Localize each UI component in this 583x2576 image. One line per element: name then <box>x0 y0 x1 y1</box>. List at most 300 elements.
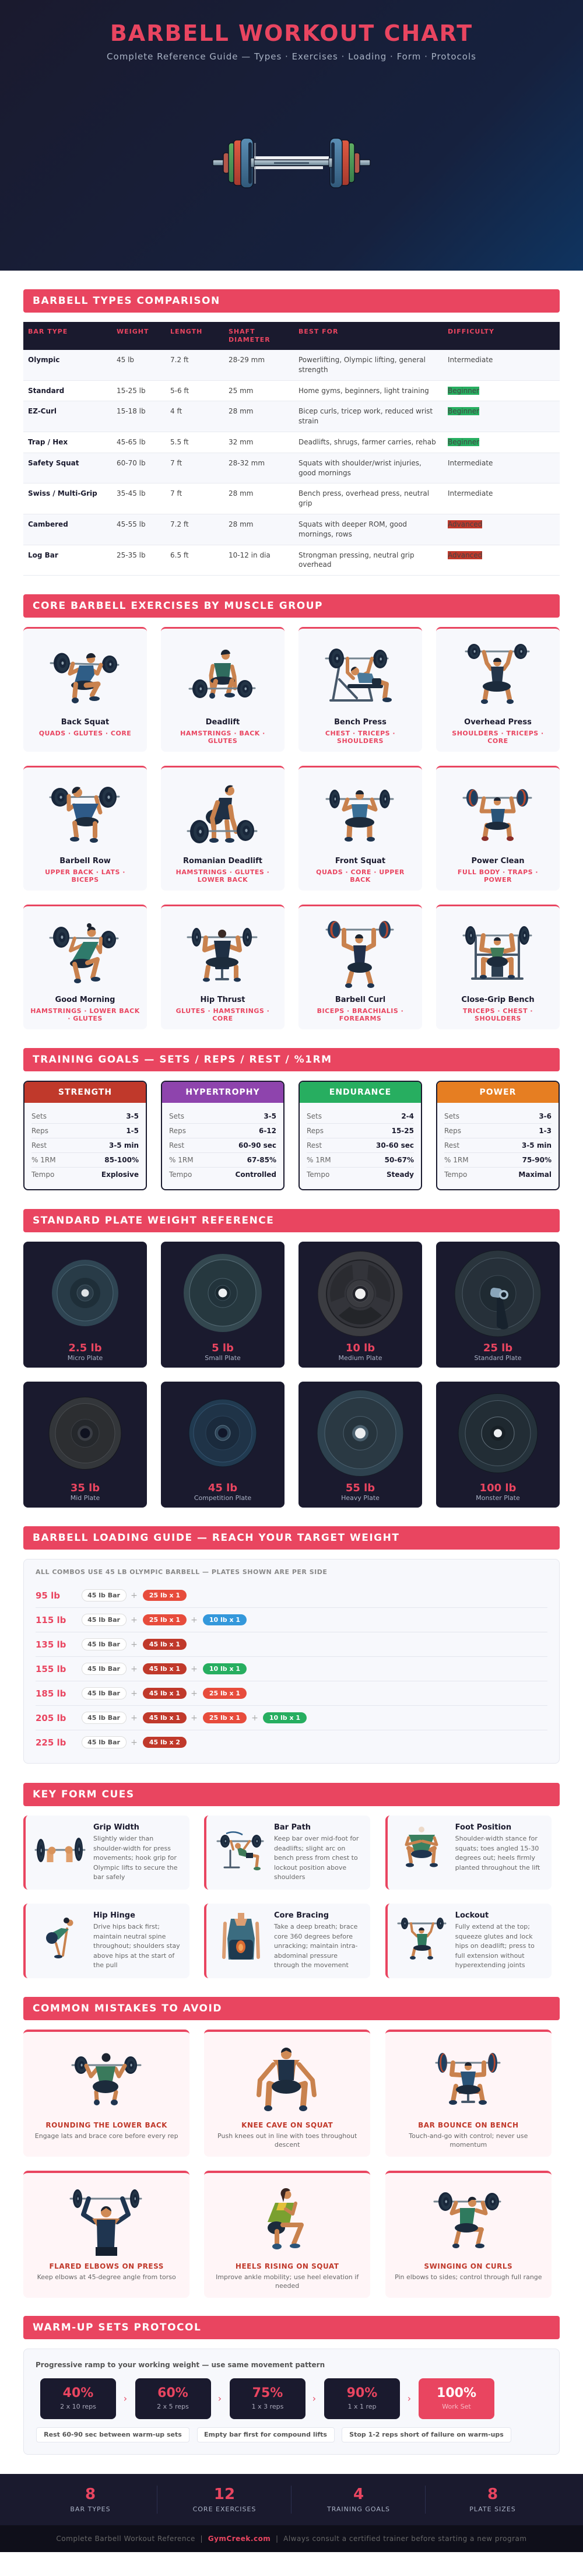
mistake fix: Touch-and-go with control; never use <box>409 2132 528 2140</box>
icon: rounding lower back figure <box>23 2030 189 2117</box>
comparison table: 35-45 lb <box>117 489 146 497</box>
plate name: Micro Plate <box>68 1354 103 1362</box>
card: bench press <box>298 627 422 752</box>
card: grip width <box>23 1816 189 1890</box>
muscle groups: CORE <box>212 1015 233 1022</box>
row: reps: 1-5 <box>126 1127 139 1135</box>
cue text: throughout; shoulders stay <box>93 1942 180 1950</box>
muscle groups: CORE <box>487 737 508 744</box>
plate name: Standard Plate <box>474 1354 522 1362</box>
plate name: Heavy Plate <box>341 1494 380 1502</box>
exercise name: Front Squat <box>335 857 385 865</box>
exercise name: Barbell Curl <box>335 996 385 1004</box>
row: reps <box>169 1124 276 1138</box>
cue text: above hips at the start of <box>93 1951 174 1960</box>
muscle groups <box>180 729 265 744</box>
row: rest <box>307 1138 414 1153</box>
icon: deadlift figure <box>189 650 255 699</box>
icon: bar path bench figure <box>204 1816 271 1885</box>
row: 205 lb: + <box>191 1713 198 1723</box>
cue text: bar safely <box>93 1873 125 1881</box>
comparison table: Intermediate <box>448 356 493 364</box>
stat: training goals: TRAINING GOALS <box>327 2505 390 2513</box>
card: close-grip bench <box>436 905 560 1029</box>
card: knee cave on squat <box>204 2030 370 2157</box>
row: reps <box>444 1124 552 1138</box>
icon: barbell <box>212 138 371 188</box>
row: sets <box>444 1109 552 1124</box>
row: 205 lb: + <box>131 1713 138 1723</box>
row: percent 1RM: % 1RM <box>31 1156 56 1164</box>
comparison table: Standard <box>28 387 64 395</box>
row: percent 1RM <box>444 1153 552 1168</box>
row: sets: Sets <box>307 1112 322 1120</box>
row: 155 lb: + <box>131 1664 138 1674</box>
card: foot position <box>385 1816 552 1890</box>
row: 135 lb: + <box>131 1640 138 1649</box>
cue text: degrees out; heels firmly <box>455 1854 535 1862</box>
comparison table: 45-65 lb <box>117 438 146 446</box>
row: tempo: Tempo <box>31 1170 54 1179</box>
arrow: › <box>124 2393 127 2404</box>
section: core exercises <box>23 594 560 1022</box>
card: strength <box>23 1081 147 1190</box>
muscle groups: FOREARMS <box>339 1015 381 1022</box>
icon: grip width hands on bar <box>23 1816 90 1885</box>
heading <box>23 289 560 313</box>
row: 95 lb: 95 lb <box>36 1590 60 1601</box>
icon: core bracing torso <box>204 1904 271 1974</box>
comparison table: WEIGHT <box>117 328 149 335</box>
icon: lockout figure <box>385 1904 452 1974</box>
row: sets: 3-6 <box>539 1112 552 1120</box>
row: tempo <box>307 1170 414 1179</box>
row: 155 lb: 10 lb x 1 <box>209 1665 240 1673</box>
stat: training goals <box>292 2474 426 2525</box>
icon: overhead press figure <box>465 644 529 704</box>
exercise name: Barbell Row <box>59 857 111 865</box>
footer: Complete Barbell Workout Reference | GymCreek.com | Always consult a certified trainer before starting a new program <box>56 2535 527 2543</box>
cue text: Keep bar over mid-foot for <box>274 1835 359 1842</box>
heading <box>23 1997 560 2020</box>
stat: plate sizes <box>426 2474 560 2525</box>
row: 205 lb: 45 lb Bar <box>87 1714 120 1722</box>
row: 205 lb: 45 lb x 1 <box>149 1714 180 1722</box>
row: percent 1RM: % 1RM <box>444 1156 469 1164</box>
muscle groups: FULL BODY · TRAPS · <box>458 868 538 876</box>
cue text: Shoulder-width stance for <box>455 1835 538 1842</box>
step: 40%: 40% <box>63 2386 93 2400</box>
card: deadlift <box>161 627 285 752</box>
comparison table: Bench press, overhead press, neutral grip <box>298 489 429 507</box>
heading <box>23 1209 560 1232</box>
comparison table: Intermediate <box>448 489 493 497</box>
stats band <box>0 2474 583 2525</box>
comparison table: 10-12 in dia <box>229 551 271 559</box>
stat: core exercises: 12 <box>214 2486 235 2503</box>
row: 205 lb: 10 lb x 1 <box>269 1714 300 1722</box>
heading <box>23 594 560 618</box>
cue text: unracking; maintain intra- <box>274 1942 357 1950</box>
stat: plate sizes: 8 <box>487 2486 498 2503</box>
cue title: Core Bracing <box>274 1911 329 1920</box>
heading <box>23 1526 560 1550</box>
muscle groups: CHEST · TRICEPS · <box>325 729 395 737</box>
comparison table: 15-25 lb <box>117 387 146 395</box>
mistake fix: Engage lats and brace core before every rep <box>35 2132 178 2140</box>
icon: bench press figure <box>325 649 392 702</box>
muscle groups: GLUTES · HAMSTRINGS · <box>176 1007 269 1015</box>
cue text <box>274 1834 359 1883</box>
comparison table: 7 ft <box>170 489 182 497</box>
row: 115 lb: 10 lb x 1 <box>209 1616 240 1624</box>
weight: 45 lb <box>208 1482 237 1494</box>
row: 115 lb: 25 lb x 1 <box>149 1616 180 1624</box>
card: 55 lb plate <box>298 1382 422 1508</box>
row: 225 lb: + <box>131 1738 138 1747</box>
stat: core exercises <box>157 2474 292 2525</box>
weight: 2.5 lb <box>68 1342 102 1354</box>
comparison table: 28 mm <box>229 489 253 497</box>
title: BARBELL WORKOUT CHART <box>110 20 473 46</box>
comparison table: 25 mm <box>229 387 253 395</box>
row: rest <box>169 1138 276 1153</box>
goal header <box>162 1082 283 1103</box>
row: 95 lb <box>36 1583 547 1608</box>
row: tempo <box>31 1170 139 1179</box>
comparison table: LENGTH <box>170 328 202 335</box>
comparison table: SHAFT <box>229 328 255 335</box>
goal header: ENDURANCE <box>329 1088 391 1097</box>
icon: foot position squat figure <box>385 1816 452 1885</box>
row: reps: 15-25 <box>392 1127 414 1135</box>
row: percent 1RM <box>307 1153 414 1168</box>
icon: heavy plate <box>317 1390 403 1476</box>
row: tempo: Maximal <box>518 1170 552 1179</box>
icon: barbell curl figure <box>325 921 394 988</box>
note: ALL COMBOS USE 45 LB OLYMPIC BARBELL — PLATES SHOWN ARE PER SIDE <box>36 1568 327 1576</box>
exercise name: Overhead Press <box>464 718 532 727</box>
note: stop short: Stop 1-2 reps short of failure on warm-ups <box>349 2431 504 2438</box>
weight: 55 lb <box>346 1482 375 1494</box>
icon: medium plate <box>317 1251 403 1337</box>
card: swinging on curls <box>385 2171 552 2298</box>
heading <box>23 1048 560 1071</box>
goal header <box>300 1082 421 1103</box>
row: 155 lb: + <box>191 1664 198 1674</box>
step: 40% <box>40 2378 116 2419</box>
comparison table <box>23 322 560 576</box>
row: reps: Reps <box>444 1127 461 1135</box>
comparison table: BAR TYPE <box>28 328 68 335</box>
heading: STANDARD PLATE WEIGHT REFERENCE <box>33 1215 274 1226</box>
card: power <box>436 1081 560 1190</box>
muscle groups <box>325 729 395 744</box>
icon: competition plate <box>189 1399 257 1467</box>
muscle groups: BACK <box>350 876 371 883</box>
row: sets <box>307 1109 414 1124</box>
muscle groups: LOWER BACK <box>198 876 248 883</box>
note: empty bar <box>197 2427 335 2442</box>
row: 135 lb <box>36 1632 547 1657</box>
icon: micro plate <box>52 1260 118 1326</box>
goal header: HYPERTROPHY <box>185 1088 260 1097</box>
row: 155 lb: 155 lb <box>36 1664 66 1674</box>
plate name: Small Plate <box>205 1354 241 1362</box>
mistake title: ROUNDING THE LOWER BACK <box>45 2121 167 2129</box>
row: rest <box>31 1138 139 1153</box>
muscle groups: BICEPS · BRACHIALIS · <box>317 1007 403 1015</box>
row: 185 lb: 185 lb <box>36 1688 66 1699</box>
row: 135 lb: 45 lb Bar <box>87 1641 120 1648</box>
section: barbell loading guide <box>0 1526 583 1764</box>
cue text: full extension without <box>455 1951 525 1960</box>
muscle groups: QUADS · GLUTES · CORE <box>39 729 131 737</box>
comparison table: Log Bar <box>28 551 58 559</box>
row: 95 lb: 25 lb x 1 <box>149 1592 180 1599</box>
stat: bar types <box>23 2474 157 2525</box>
exercise name: Close-Grip Bench <box>461 996 535 1004</box>
comparison table: Deadlifts, shrugs, farmer carries, rehab <box>298 438 436 446</box>
icon: swinging on curls figure <box>385 2171 552 2258</box>
cue text: hips on deadlift; press to <box>455 1942 535 1950</box>
row: 225 lb <box>36 1730 547 1755</box>
cue text <box>93 1834 178 1883</box>
comparison table: 15-18 lb <box>117 407 146 415</box>
icon: bar bounce figure <box>385 2030 552 2117</box>
heading: KEY FORM CUES <box>33 1789 135 1800</box>
panel: loading combos <box>23 1559 560 1764</box>
row: 225 lb: 225 lb <box>36 1737 66 1748</box>
row: reps: Reps <box>307 1127 324 1135</box>
cue text: movements; hook grip for <box>93 1854 177 1862</box>
comparison table: Advanced <box>448 551 482 559</box>
section: plate weight reference <box>23 1209 560 1508</box>
card: 5 lb plate <box>161 1242 285 1368</box>
mistake title: FLARED ELBOWS ON PRESS <box>49 2262 164 2270</box>
weight: 35 lb <box>71 1482 100 1494</box>
icon: standard plate <box>455 1250 541 1337</box>
exercise name: Deadlift <box>206 718 240 727</box>
row: tempo <box>444 1170 552 1179</box>
comparison table: 6.5 ft <box>170 551 189 559</box>
mistake fix <box>204 2132 370 2149</box>
exercise name: Romanian Deadlift <box>183 857 262 865</box>
icon: hip hinge figure <box>23 1904 90 1974</box>
mistake fix: descent <box>275 2141 300 2149</box>
comparison table: Powerlifting, Olympic lifting, general strength <box>298 356 426 374</box>
icon: hip thrust figure <box>187 928 258 982</box>
stat: training goals: 4 <box>353 2486 364 2503</box>
muscle groups <box>452 729 544 744</box>
comparison table: 32 mm <box>229 438 253 446</box>
cue text: hyperextending joints <box>455 1961 525 1969</box>
comparison table: Strongman pressing, neutral grip overhead <box>298 551 415 569</box>
step: 75%: 1 x 3 reps <box>252 2403 283 2410</box>
heading: BARBELL LOADING GUIDE — REACH YOUR TARGET WEIGHT <box>33 1532 399 1544</box>
card: core bracing <box>204 1904 370 1978</box>
comparison table: 45-55 lb <box>117 520 146 528</box>
cue text: squeeze glutes and lock <box>455 1933 533 1940</box>
muscle groups: SHOULDERS <box>475 1015 521 1022</box>
row: 115 lb <box>36 1608 547 1632</box>
icon: heels rising figure <box>204 2171 370 2258</box>
muscle groups: · GLUTES <box>68 1015 103 1022</box>
note: rest <box>36 2427 189 2442</box>
comparison table: Cambered <box>28 520 68 528</box>
comparison table: 28 mm <box>229 407 253 415</box>
card: lockout <box>385 1904 552 1978</box>
note: rest: Rest 60-90 sec between warm-up sets <box>44 2431 182 2438</box>
muscle groups: BICEPS <box>71 876 99 883</box>
row: 155 lb: 45 lb Bar <box>87 1665 120 1673</box>
row: reps <box>31 1124 139 1138</box>
comparison table: 28 mm <box>229 520 253 528</box>
weight: 100 lb <box>480 1482 516 1494</box>
cue text: Slightly wider than <box>93 1835 153 1842</box>
footer <box>0 2525 583 2552</box>
step: 75%: 75% <box>252 2386 283 2400</box>
heading: TRAINING GOALS — SETS / REPS / REST / %1RM <box>33 1054 332 1066</box>
muscle groups <box>30 1007 140 1022</box>
weight: 25 lb <box>483 1342 512 1354</box>
card: 10 lb plate <box>298 1242 422 1368</box>
comparison table: Intermediate <box>448 459 493 467</box>
muscle groups: HAMSTRINGS · LOWER BACK <box>30 1007 140 1015</box>
row: 205 lb: 25 lb x 1 <box>209 1714 240 1722</box>
icon: flared elbows figure <box>23 2171 189 2258</box>
goal header <box>24 1082 146 1103</box>
row: sets: Sets <box>169 1112 184 1120</box>
row: percent 1RM: % 1RM <box>307 1156 331 1164</box>
row: 185 lb <box>36 1681 547 1706</box>
comparison table: EZ-Curl <box>28 407 57 415</box>
comparison table: Safety Squat <box>28 459 79 467</box>
row: tempo: Tempo <box>169 1170 192 1179</box>
comparison table: 7.2 ft <box>170 520 189 528</box>
comparison table: Trap / Hex <box>28 438 68 446</box>
card: back squat <box>23 627 147 752</box>
icon: good morning figure <box>49 923 119 983</box>
cue text: squats; toes angled 15-30 <box>455 1844 539 1852</box>
cue text: lockout position above <box>274 1864 346 1871</box>
comparison table: Squats with deeper ROM, good mornings, rows <box>298 520 407 538</box>
row: 155 lb: 45 lb x 1 <box>149 1665 180 1673</box>
comparison table: 28-32 mm <box>229 459 265 467</box>
muscle groups: UPPER BACK · LATS · <box>45 868 125 876</box>
hero header <box>0 0 583 271</box>
icon: knee cave figure <box>204 2030 370 2117</box>
section: key form cues <box>0 1783 583 1978</box>
comparison table: 25-35 lb <box>117 551 146 559</box>
heading: CORE BARBELL EXERCISES BY MUSCLE GROUP <box>33 600 323 612</box>
muscle groups: HAMSTRINGS · BACK · <box>180 729 265 737</box>
icon: romanian deadlift figure <box>187 785 258 843</box>
mistake fix: Pin elbows to sides; control through full range <box>395 2273 542 2281</box>
card: power clean <box>436 766 560 891</box>
card: overhead press <box>436 627 560 752</box>
muscle groups <box>458 868 538 883</box>
mistake fix <box>385 2132 552 2149</box>
comparison table: 45 lb <box>117 356 134 364</box>
heading: BARBELL TYPES COMPARISON <box>33 295 220 307</box>
mistake title: HEELS RISING ON SQUAT <box>236 2262 339 2270</box>
muscle groups <box>316 868 405 883</box>
plate name: Mid Plate <box>71 1494 100 1502</box>
heading: COMMON MISTAKES TO AVOID <box>33 2003 222 2014</box>
plate name: Monster Plate <box>476 1494 520 1502</box>
row: 115 lb: 115 lb <box>36 1615 66 1625</box>
section: barbell types comparison <box>23 289 560 576</box>
exercise name: Bench Press <box>334 718 387 727</box>
heading: WARM-UP SETS PROTOCOL <box>33 2322 201 2333</box>
mistake title: BAR BOUNCE ON BENCH <box>418 2121 518 2129</box>
stat: plate sizes: PLATE SIZES <box>469 2505 516 2513</box>
step: 90% <box>324 2378 400 2419</box>
card: barbell row <box>23 766 147 891</box>
step: 100% work set <box>419 2378 494 2419</box>
panel: warm-up ramp <box>23 2349 560 2455</box>
cue text: shoulder-width for press <box>93 1844 171 1852</box>
subtitle: Complete Reference Guide — Types · Exercises · Loading · Form · Protocols <box>107 51 476 62</box>
card: romanian deadlift <box>161 766 285 891</box>
muscle groups: SHOULDERS · TRICEPS · <box>452 729 544 737</box>
row: percent 1RM: % 1RM <box>169 1156 194 1164</box>
row: reps: 6-12 <box>259 1127 276 1135</box>
cue text <box>455 1922 535 1970</box>
comparison table: Bicep curls, tricep work, reduced wrist strain <box>298 407 433 425</box>
icon: power clean figure <box>463 789 532 841</box>
row: rest: 30-60 sec <box>376 1141 414 1149</box>
cue text <box>274 1922 357 1970</box>
icon: back squat figure <box>50 653 119 703</box>
row: rest: 3-5 min <box>109 1141 139 1149</box>
exercise name: Good Morning <box>55 996 115 1004</box>
step: 75% <box>230 2378 305 2419</box>
cue text <box>93 1922 180 1970</box>
comparison table: Beginner <box>448 438 479 446</box>
card: bar bounce on bench <box>385 2030 552 2157</box>
icon: mid plate <box>49 1397 121 1470</box>
row: sets: 3-5 <box>264 1112 276 1120</box>
row: percent 1RM: 85-100% <box>104 1156 139 1164</box>
step: 90%: 1 x 1 rep <box>347 2403 377 2410</box>
row: 225 lb: 45 lb Bar <box>87 1739 120 1746</box>
weight: 5 lb <box>212 1342 234 1354</box>
row: 115 lb: + <box>191 1615 198 1625</box>
row: tempo: Steady <box>387 1170 414 1179</box>
mistake fix: Keep elbows at 45-degree angle from torso <box>37 2273 176 2281</box>
goal header: STRENGTH <box>58 1088 112 1097</box>
row: 115 lb: 45 lb Bar <box>87 1616 120 1624</box>
section: common mistakes <box>0 1997 583 2298</box>
card: 25 lb plate <box>436 1242 560 1368</box>
exercise name: Power Clean <box>471 857 525 865</box>
comparison table: Beginner <box>448 407 479 415</box>
muscle groups <box>317 1007 403 1022</box>
card: 2.5 lb plate <box>23 1242 147 1368</box>
step: 60%: 60% <box>157 2386 188 2400</box>
mistake title: SWINGING ON CURLS <box>424 2262 512 2270</box>
row: tempo: Explosive <box>101 1170 139 1179</box>
comparison table: 4 ft <box>170 407 182 415</box>
muscle groups: HAMSTRINGS · GLUTES · <box>176 868 269 876</box>
muscle groups <box>176 868 269 883</box>
muscle groups: GLUTES <box>208 737 237 744</box>
note: stop short <box>342 2427 511 2442</box>
comparison table: 5.5 ft <box>170 438 189 446</box>
icon: small plate <box>184 1254 262 1332</box>
